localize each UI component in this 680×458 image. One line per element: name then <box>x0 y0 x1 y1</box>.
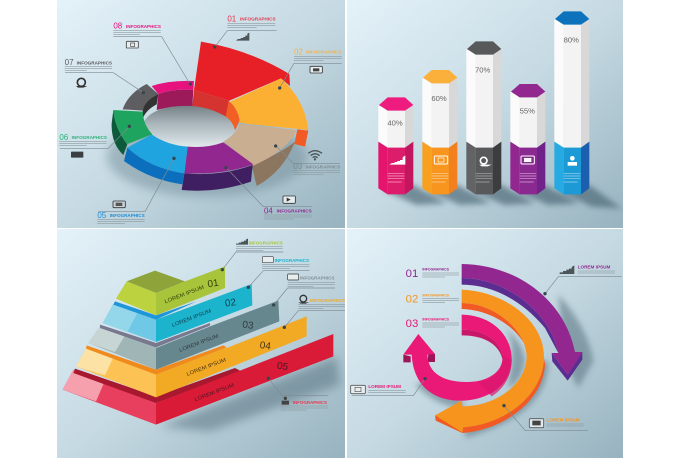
icon: monitor chart <box>126 41 138 48</box>
label 03 with laptop icon: INFOGRAPHICS <box>300 276 334 281</box>
icon: tablet <box>113 201 125 208</box>
column 80% blue: 80% <box>564 36 579 45</box>
icon: laptop <box>310 66 322 73</box>
leader lines and dots <box>352 277 622 430</box>
step 02 cyan: 02 <box>224 297 237 310</box>
pyramid shadow <box>160 356 340 431</box>
column 40% pink: 40% <box>387 119 403 128</box>
step 05 red: 05 <box>276 361 289 373</box>
label 04: 04 <box>264 206 273 215</box>
label 05 with person icon <box>281 397 328 410</box>
label 04 with globe icon: INFOGRAPHICS <box>310 298 345 303</box>
label 02 with monitor icon: INFOGRAPHICS <box>275 258 309 263</box>
step 02 cyan: LOREM IPSUM <box>171 308 212 329</box>
arrow 01 purple <box>462 264 582 381</box>
column 60% orange <box>422 70 457 194</box>
segment 05 blue <box>127 134 188 173</box>
panel: stepped pyramid <box>57 229 345 458</box>
segment 04 side <box>182 165 253 191</box>
label 02: 02 <box>294 48 303 57</box>
leader lines and dots <box>60 31 342 212</box>
step 01 green <box>116 266 225 315</box>
label 03: INFOGRAPHICS <box>422 318 450 322</box>
segment 01 inner wall <box>192 90 229 117</box>
icon: globe hand <box>76 78 87 88</box>
label 03 <box>293 162 340 175</box>
step 01 green: 01 <box>207 278 220 290</box>
icon: play monitor <box>283 196 295 203</box>
callout: bottom right: LOREM IPSUM <box>546 417 580 422</box>
step 05 red: LOREM IPSUM <box>194 383 235 403</box>
label 05: 05 <box>97 211 107 220</box>
label 04 <box>264 206 312 219</box>
callout: top right <box>560 265 615 274</box>
step 05 red <box>63 334 333 425</box>
label 05: INFOGRAPHICS <box>110 213 145 218</box>
label 01: 01 <box>227 15 237 24</box>
arrow 02 orange <box>435 290 545 433</box>
label 08 <box>113 22 161 35</box>
label 04 with globe icon <box>298 295 345 309</box>
segment 06 green <box>113 110 152 144</box>
label 01 with bars icon: INFOGRAPHICS <box>249 240 283 245</box>
label 03: INFOGRAPHICS <box>305 164 340 169</box>
icon: bars <box>236 33 249 41</box>
step 04 orange: 04 <box>259 340 272 353</box>
label 01: 01 <box>406 268 418 280</box>
label 05 with person icon: INFOGRAPHICS <box>293 400 327 405</box>
label 01 <box>406 268 459 280</box>
label 07: INFOGRAPHICS <box>77 60 112 65</box>
leader lines and dots <box>221 252 345 395</box>
label 02 <box>406 293 459 306</box>
panel: donut chart <box>57 0 345 228</box>
label 03 <box>406 318 459 330</box>
callout: bottom right <box>529 417 584 428</box>
segment 04 purple <box>184 142 253 174</box>
label 08: INFOGRAPHICS <box>126 24 161 29</box>
segment 07 gray <box>123 84 158 111</box>
label 06: INFOGRAPHICS <box>72 135 107 140</box>
label 03 with laptop icon <box>288 274 335 286</box>
step 01 green: LOREM IPSUM <box>164 285 205 305</box>
column 40% pink <box>378 97 413 194</box>
column shadows <box>383 185 622 208</box>
segment 08 pink <box>152 81 194 94</box>
icon: dark screen <box>71 152 83 158</box>
panel: hexagonal bar chart <box>347 0 623 228</box>
step 02 cyan <box>103 284 252 342</box>
arrow 03 pink <box>403 315 512 401</box>
donut shadow <box>107 117 307 197</box>
label 06: 06 <box>59 133 69 142</box>
label 03: 03 <box>293 162 303 171</box>
label 01 <box>227 15 276 27</box>
panel: curved arrows <box>347 229 623 458</box>
label 02: INFOGRAPHICS <box>422 293 450 297</box>
icon: wifi <box>308 151 322 160</box>
column 70% gray <box>466 41 501 194</box>
label 02: INFOGRAPHICS <box>306 50 342 55</box>
step 03 gray <box>88 301 279 370</box>
step 04 orange: LOREM IPSUM <box>186 357 227 378</box>
column 55% purple: 55% <box>520 106 535 115</box>
segment 02 orange <box>230 78 308 130</box>
callout: top right: LOREM IPSUM <box>578 265 610 270</box>
label 02: 02 <box>406 294 418 306</box>
column 55% purple <box>510 84 545 194</box>
segment 05 side <box>124 148 184 184</box>
segment 02 inner wall <box>226 101 240 131</box>
label 02 <box>294 48 342 61</box>
column 80% blue <box>554 11 589 194</box>
segment 07 inner wall <box>143 94 158 118</box>
label 02 with monitor icon <box>262 257 309 269</box>
label 01: INFOGRAPHICS <box>422 268 450 272</box>
callout: left <box>351 384 406 394</box>
segment 01 red <box>194 42 290 101</box>
segment 03 beige <box>223 124 297 166</box>
segment 03 side <box>252 142 295 186</box>
arrow shadows <box>415 295 593 438</box>
step 03 gray: 03 <box>242 319 255 332</box>
column 70% gray: 70% <box>475 65 491 74</box>
callout: left: LOREM IPSUM <box>368 384 401 389</box>
label 04: INFOGRAPHICS <box>277 208 312 213</box>
label 08: 08 <box>113 22 123 31</box>
step 03 gray: LOREM IPSUM <box>179 333 220 354</box>
segment 06 side <box>112 110 127 155</box>
label 03: 03 <box>406 318 418 330</box>
label 01 with bars icon <box>236 239 283 251</box>
label 05 <box>97 211 145 223</box>
label 01: INFOGRAPHICS <box>240 17 276 22</box>
segment 08 inner wall <box>157 90 193 110</box>
donut hole <box>143 104 240 148</box>
label 07: 07 <box>65 58 74 67</box>
label 06 <box>59 133 107 145</box>
column 60% orange: 60% <box>431 94 447 103</box>
step 04 orange <box>76 316 307 397</box>
label 07 <box>65 58 112 71</box>
segment 02 side <box>294 129 308 147</box>
